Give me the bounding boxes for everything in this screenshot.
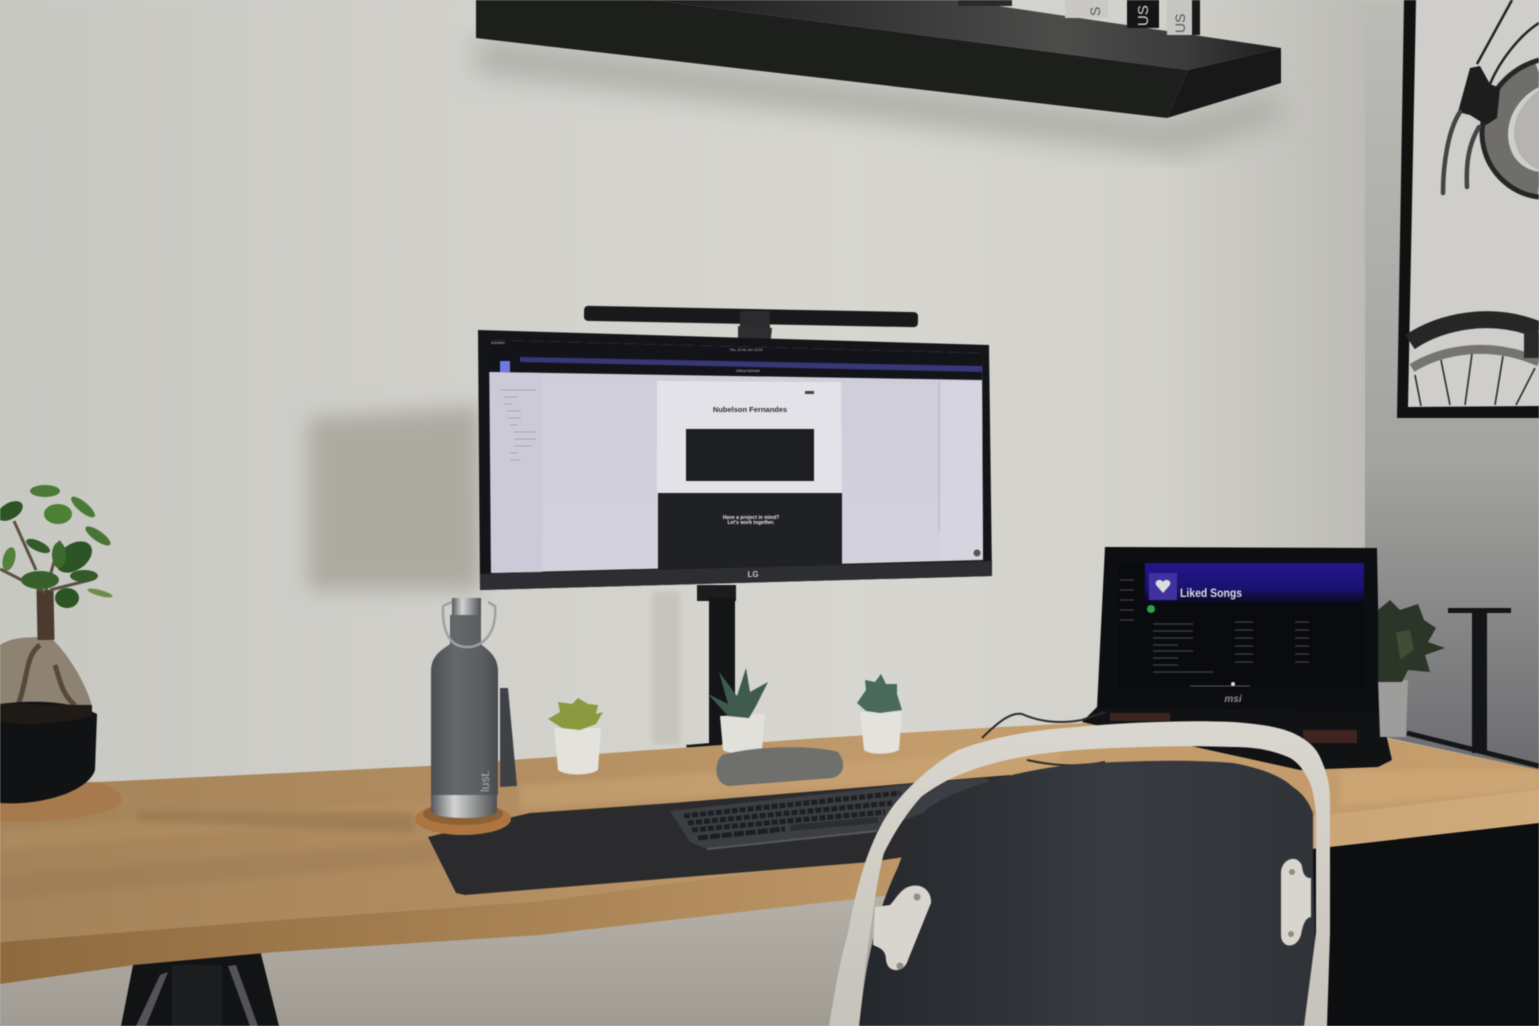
succulent right <box>857 674 902 754</box>
right plant and stand <box>1378 600 1511 753</box>
floating shelf <box>476 0 1281 118</box>
screen <box>489 340 983 573</box>
books on shelf: US <box>1172 14 1188 33</box>
laptop screen <box>1118 563 1364 689</box>
desk top surface <box>0 722 1539 942</box>
water bottle and coaster <box>415 598 511 835</box>
tyre ring <box>1495 73 1539 185</box>
screen: Let's work together. <box>727 520 775 526</box>
caudex root <box>0 637 92 712</box>
laptop: msi <box>1224 694 1242 705</box>
laptop screen: Liked Songs <box>1180 586 1242 600</box>
water bottle and coaster: lust. <box>478 770 492 792</box>
cables <box>982 712 1105 765</box>
pot <box>0 702 97 803</box>
right wall baseboard line <box>1407 733 1539 766</box>
desk front edge <box>0 790 1539 984</box>
chair back cushion <box>859 761 1316 1026</box>
wood planks and shading <box>0 748 1539 900</box>
books on shelf: US <box>1135 5 1152 26</box>
dark cabinet under desk <box>1310 805 1539 1026</box>
trunk and branches <box>45 590 46 640</box>
monitor arm <box>686 585 736 756</box>
monitor arm shadow on wall <box>652 592 680 744</box>
left bracket screws <box>896 894 920 970</box>
stem <box>1458 66 1500 125</box>
screen: Official Website <box>736 369 760 373</box>
coaster <box>415 803 511 835</box>
wheel <box>1410 320 1539 342</box>
screen: Thu, 10 de Jun 10:04 <box>729 348 763 352</box>
chair frame <box>829 721 1330 1026</box>
laptop <box>1082 547 1392 770</box>
keyboard <box>670 778 1000 849</box>
monitor light bar <box>584 306 918 346</box>
bonsai plant <box>0 485 121 822</box>
bottle body <box>431 615 498 795</box>
monitor shadow on wall <box>308 406 482 590</box>
desk mat <box>428 775 1020 895</box>
screen: Have a project in mind? <box>723 515 779 521</box>
right bracket screws <box>1288 869 1295 937</box>
monitor <box>478 330 992 590</box>
stone glasses case <box>716 747 843 786</box>
leaves <box>0 485 113 608</box>
books on shelf: S <box>1087 7 1103 16</box>
cork coaster <box>0 782 121 822</box>
books on shelf <box>958 0 1200 35</box>
screen: Activities <box>491 341 505 345</box>
logo: LG <box>747 570 759 579</box>
left bracket <box>873 885 931 970</box>
right side wall <box>1365 0 1539 770</box>
succulent left <box>548 698 603 774</box>
handle <box>443 602 495 647</box>
chair <box>829 721 1330 1026</box>
succulent middle <box>708 668 768 754</box>
under-desk wall <box>0 880 900 1026</box>
right bracket <box>1281 859 1311 946</box>
framed poster <box>1397 0 1539 418</box>
shelf shadow on wall <box>476 38 1290 155</box>
phone stand behind bottle <box>500 688 517 787</box>
screen: Nubelson Fernandes <box>713 405 787 414</box>
trestle legs <box>121 950 279 1026</box>
